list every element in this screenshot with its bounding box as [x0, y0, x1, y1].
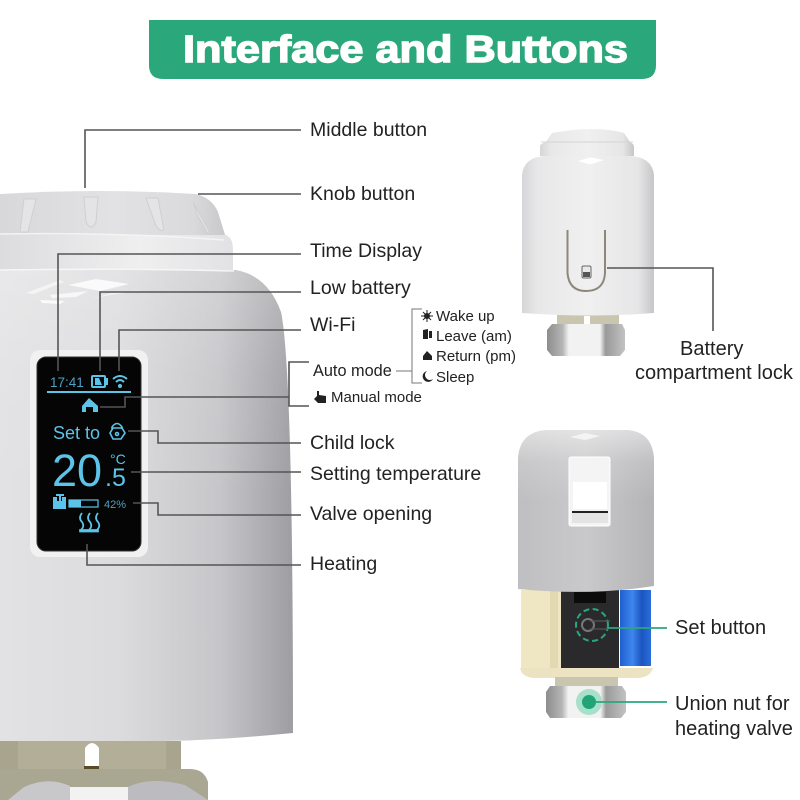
label: union nut: heating valve — [675, 718, 793, 740]
display bezel and screen: °C — [110, 451, 126, 467]
label: battery compartment lock: Battery — [680, 338, 743, 360]
main body — [0, 270, 293, 741]
label: union nut: Union nut for — [675, 693, 790, 715]
home icon — [82, 398, 98, 412]
label: wi-fi: Wi-Fi — [310, 314, 355, 336]
body — [522, 156, 654, 316]
base plate — [520, 668, 653, 678]
circuit board — [561, 590, 619, 668]
sleep: Sleep — [436, 369, 474, 386]
display bezel and screen — [30, 350, 148, 557]
cover — [518, 430, 654, 592]
neck ring — [0, 235, 233, 272]
logo reflection — [26, 279, 142, 304]
set button — [576, 609, 610, 641]
thermostat: battery lock view — [522, 129, 713, 356]
time reading: 17:41 — [50, 375, 84, 390]
title banner — [149, 20, 656, 79]
wake up: Wake up — [436, 308, 495, 325]
wifi icon — [113, 376, 127, 387]
valve icon — [53, 494, 66, 509]
nut — [546, 686, 626, 718]
leave: Leave (am) — [436, 328, 512, 345]
label: knob button: Knob button — [310, 183, 415, 205]
label: union nut — [675, 693, 793, 740]
battery icon — [582, 266, 591, 278]
label: battery compartment lock: compartment lock — [635, 362, 794, 384]
beige battery holder — [521, 590, 579, 668]
leader lines — [58, 130, 422, 565]
logo reflection — [570, 433, 600, 440]
large thermostat valve — [0, 191, 293, 800]
battery — [620, 590, 651, 666]
title banner: Interface and Buttons — [183, 29, 628, 71]
label: battery compartment lock — [635, 338, 794, 384]
return: Return (pm) — [436, 348, 516, 365]
knob — [540, 129, 634, 156]
label: time display: Time Display — [310, 240, 422, 262]
battery window — [569, 457, 610, 526]
valve bar — [69, 500, 98, 507]
label: low battery: Low battery — [310, 277, 411, 299]
label: child lock: Child lock — [310, 432, 395, 454]
label: heating: Heating — [310, 553, 377, 575]
lock icon — [110, 424, 125, 439]
base — [557, 315, 619, 327]
label: middle button: Middle button — [310, 119, 427, 141]
nut — [547, 324, 625, 356]
temperature reading: 20 — [52, 445, 102, 496]
label: manual mode with hand icon: Manual mode — [331, 389, 422, 406]
knob — [0, 191, 226, 238]
auto mode list — [421, 308, 516, 386]
battery lock leader — [607, 268, 713, 331]
set to label: Set to — [53, 423, 100, 443]
label: setting temperature: Setting temperature — [310, 463, 481, 485]
knob ridges — [20, 197, 211, 235]
label: auto mode: Auto mode — [313, 362, 392, 380]
display bezel and screen: .5 — [105, 464, 126, 492]
label: set button: Set button — [675, 617, 766, 639]
green leaders — [595, 628, 667, 702]
battery icon — [92, 376, 107, 387]
neck — [555, 677, 618, 690]
base collar — [0, 741, 181, 772]
logo reflection — [578, 158, 604, 164]
chrome nut — [0, 769, 208, 800]
heating icon — [80, 513, 99, 532]
valve percent: 42% — [104, 499, 126, 511]
union nut marker — [576, 689, 602, 715]
label: valve opening: Valve opening — [310, 503, 432, 525]
latch slot — [568, 230, 605, 291]
divider line — [47, 391, 131, 393]
thermostat: open view — [518, 430, 667, 718]
